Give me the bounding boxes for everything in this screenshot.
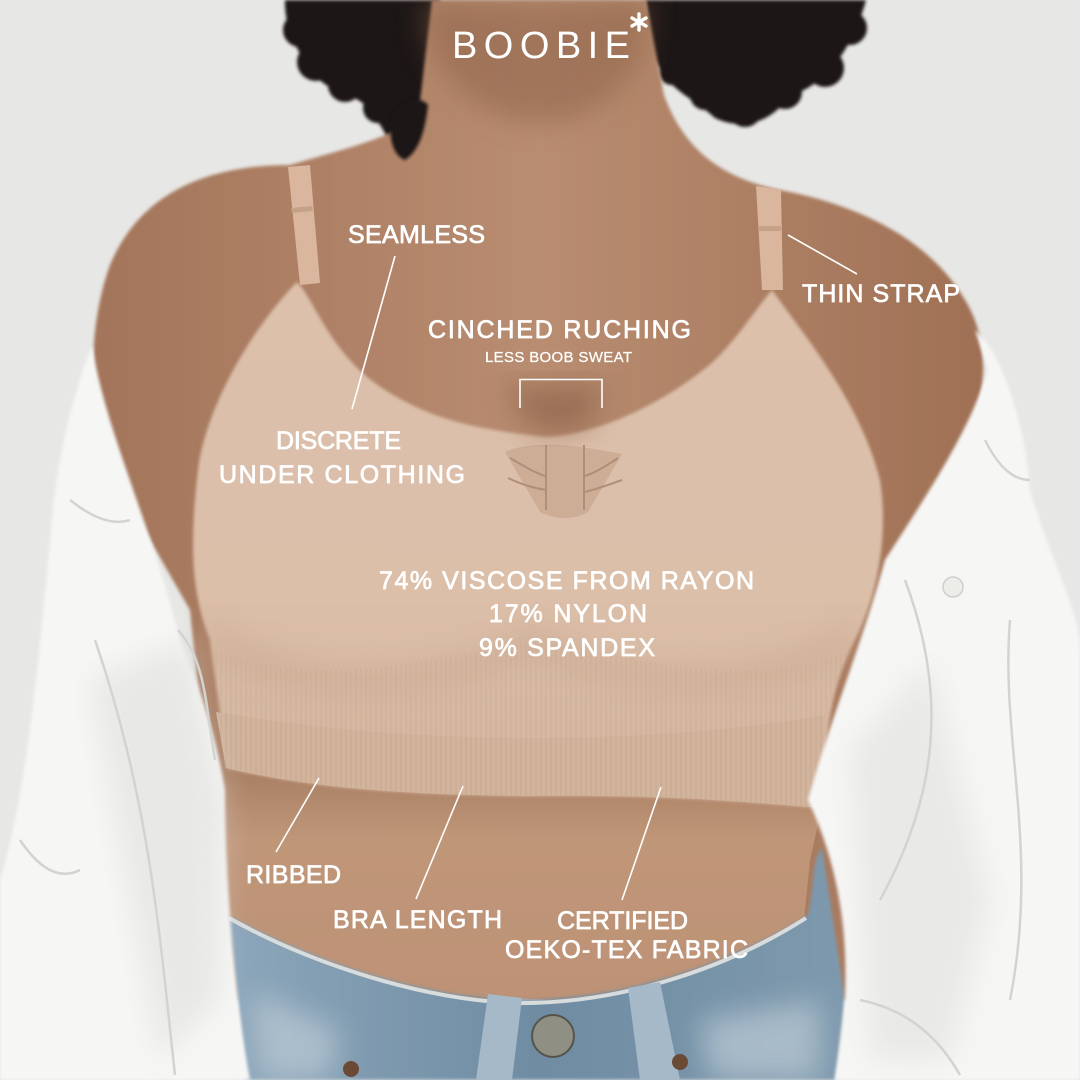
bra ruching [505,445,622,518]
face chin shadow [425,0,650,122]
bra band ribbing [216,712,825,808]
label: fabric composition [379,567,754,662]
jeans frayed waist edge [229,918,806,1003]
shirt right [808,330,1080,1080]
under-bust shading [205,610,860,695]
label: seamless [348,221,485,409]
shirt right folds [860,440,1030,1075]
label: fabric composition: 74% VISCOSE FROM RAYON [379,567,754,595]
label: fabric composition: 9% SPANDEX [479,634,655,662]
label: bra length [333,786,502,934]
bra ribbing upper [212,640,850,740]
ruching lines [508,445,622,510]
bra straps [288,165,783,290]
jeans light wash [250,990,820,1080]
label: cinched ruching: LESS BOOB SWEAT [485,349,632,366]
logo word: BOOBIE [452,25,630,67]
label: cinched ruching: CINCHED RUCHING [428,316,691,344]
label: bra length: BRA LENGTH [333,906,502,934]
label: certified oeko-tex fabric [505,787,748,964]
shirt left folds [20,500,215,1075]
bra band [216,712,825,808]
shirt button [943,577,963,597]
neckline cleavage shadow [505,385,605,432]
jeans belt loops [476,982,680,1080]
label: cinched ruching [428,316,691,408]
shirt left shade [90,640,225,1060]
label: certified oeko-tex fabric: CERTIFIED [557,907,688,935]
label: discrete under clothing: UNDER CLOTHING [219,461,465,489]
belly [220,770,830,1000]
logo: BOOBIE [452,14,646,67]
logo flower asterisk [632,14,646,30]
label: ribbed [246,778,341,889]
label: ribbed: RIBBED [246,861,341,889]
label: thin strap [788,235,960,308]
label: certified oeko-tex fabric: OEKO-TEX FABRIC [505,936,748,964]
label: seamless: SEAMLESS [348,221,485,249]
jeans [228,848,845,1080]
label: fabric composition: 17% NYLON [489,600,647,628]
hair [283,0,867,158]
jeans rivets [343,1054,688,1077]
neck and shoulders [93,0,983,1000]
jeans button [532,1015,574,1057]
strap sliders [291,206,781,231]
shirt left [0,345,250,1080]
label: thin strap: THIN STRAP [802,280,960,308]
hair strands over neck [391,100,428,160]
label: discrete under clothing: DISCRETE [276,427,401,455]
shirt right shade [850,660,990,1060]
label: discrete under clothing [219,427,465,489]
bra body [193,282,883,808]
